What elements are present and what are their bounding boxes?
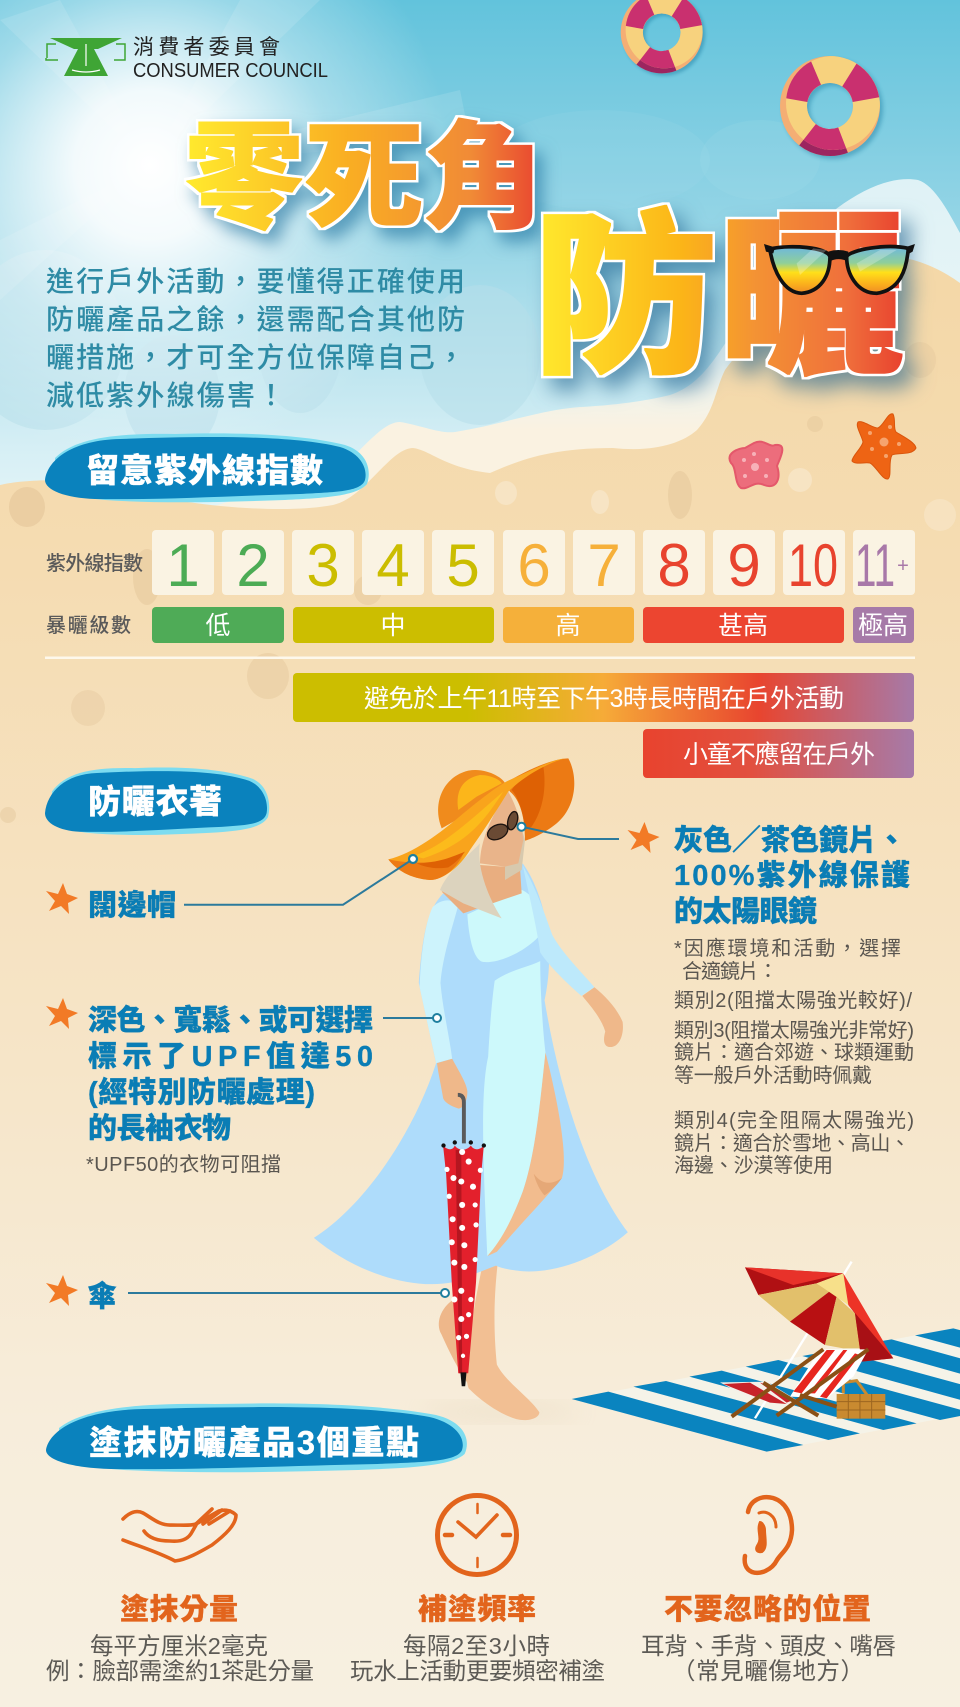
heading: 塗抹防曬產品3個重點 bbox=[46, 1403, 467, 1472]
UV number tiles: + bbox=[897, 555, 909, 577]
intro text bbox=[46, 266, 465, 411]
sunglasses notes: 類別2(阻擋太陽強光較好)/ bbox=[674, 989, 912, 1012]
dress: pale front panels bbox=[467, 890, 543, 962]
advice bar: avoid outdoors 11am-3pm bbox=[293, 673, 914, 722]
hands bbox=[437, 1059, 467, 1109]
panel: amount to apply: 例：臉部需塗約1茶匙分量 bbox=[46, 1658, 314, 1684]
exposure level bars bbox=[152, 607, 914, 643]
head: face, hair, hat and sunglasses bbox=[388, 758, 574, 918]
intro text: 防曬產品之餘，還需配合其他防 bbox=[46, 304, 465, 335]
label: 暴曬級數: 暴曬級數 bbox=[46, 614, 131, 637]
sunglasses notes: 等一般戶外活動時佩戴 bbox=[674, 1064, 872, 1087]
UV number tiles: 6 bbox=[517, 532, 551, 599]
exposure level bars: 極高 bbox=[858, 612, 908, 640]
heading: 不要忽略的位置: 不要忽略的位置 bbox=[664, 1592, 871, 1626]
background: beach foam wave bbox=[200, 179, 960, 520]
icon: hand bbox=[123, 1509, 236, 1561]
UV number tiles: 5 bbox=[446, 532, 480, 599]
callout: long-sleeved clothes: (經特別防曬處理) bbox=[88, 1075, 315, 1109]
parasol bbox=[745, 1262, 893, 1418]
callout: long-sleeved clothes bbox=[46, 998, 441, 1176]
logo text: English: CONSUMER COUNCIL bbox=[133, 60, 328, 82]
panel: reapply frequency: 玩水上活動更要頻密補塗 bbox=[350, 1658, 605, 1684]
sunglasses notes: 海邊、沙漠等使用 bbox=[674, 1154, 833, 1177]
heading: 防曬衣著: 防曬衣著 bbox=[88, 783, 222, 820]
exposure level bars: 高 bbox=[555, 612, 581, 640]
UV number tiles: 7 bbox=[587, 532, 621, 599]
starfish bullet bbox=[46, 1275, 78, 1306]
title: 零死角: 零死角 bbox=[184, 84, 544, 252]
UV number tiles: 4 bbox=[376, 532, 410, 599]
starfish bullet bbox=[628, 822, 660, 853]
basket bbox=[837, 1381, 885, 1419]
starfish bullet bbox=[46, 883, 78, 914]
panel: amount to apply bbox=[46, 1509, 314, 1684]
callout: sunglasses: 100%紫外線保護 bbox=[674, 859, 910, 892]
illustration: beach towel, parasol, deck chair and basket bbox=[572, 1262, 960, 1452]
UV number tiles: 2 bbox=[236, 532, 270, 599]
callout: sunglasses bbox=[518, 822, 914, 1177]
sunglasses notes: 鏡片：適合郊遊、球類運動 bbox=[674, 1041, 914, 1064]
deck chair bbox=[720, 1349, 868, 1417]
panel: areas not to neglect bbox=[641, 1497, 896, 1684]
illustration: woman with hat and umbrella bbox=[314, 758, 628, 1420]
text: frequency: 每隔2至3小時 bbox=[403, 1633, 550, 1659]
sunglasses notes: *因應環境和活動，選擇 bbox=[674, 936, 901, 960]
advice bar: children: 小童不應留在戶外 bbox=[683, 741, 875, 769]
icon: clock bbox=[438, 1496, 516, 1574]
callout: long-sleeved clothes: 深色、寬鬆、或可選擇 bbox=[88, 1003, 373, 1037]
sleeves bbox=[420, 900, 458, 1063]
title: 防曬: 防曬 bbox=[532, 154, 904, 409]
label: 紫外線指數: 紫外線指數 bbox=[46, 552, 143, 575]
heading: 留意紫外線指數: 留意紫外線指數 bbox=[86, 452, 323, 489]
dress: flowing cape bbox=[314, 864, 628, 1284]
background: sand pebbles bbox=[0, 342, 956, 823]
text: amount: 每平方厘米2毫克 bbox=[90, 1633, 268, 1659]
advice bar: children bbox=[643, 729, 914, 778]
callout: long-sleeved clothes: 的長袖衣物 bbox=[88, 1111, 231, 1145]
sunglasses notes: 類別4(完全阻隔太陽強光) bbox=[674, 1109, 914, 1132]
icon: pink starfish bbox=[730, 442, 782, 488]
callout: sunglasses: 灰色／茶色鏡片、 bbox=[674, 823, 906, 857]
UV number tiles: 11 bbox=[855, 532, 895, 599]
icon: orange starfish bbox=[852, 414, 916, 479]
heading: 塗抹分量: 塗抹分量 bbox=[120, 1592, 238, 1626]
callout: umbrella bbox=[46, 1275, 449, 1313]
UV number tiles: 10 bbox=[788, 532, 838, 599]
starfish bullet bbox=[46, 998, 78, 1029]
exposure level bars: 低 bbox=[205, 612, 231, 640]
UV number tiles: 8 bbox=[657, 532, 691, 599]
intro text: 進行戶外活動，要懂得正確使用 bbox=[46, 266, 465, 297]
sunglasses notes: 合適鏡片： bbox=[682, 960, 778, 983]
sunglasses notes bbox=[674, 936, 914, 1177]
callout: long-sleeved clothes: 標示了UPF值達50 bbox=[88, 1040, 373, 1073]
UV number tiles bbox=[152, 530, 915, 599]
heading: 塗抹防曬產品3個重點: 塗抹防曬產品3個重點 bbox=[89, 1424, 419, 1461]
panel: reapply frequency bbox=[350, 1496, 605, 1684]
legs bbox=[439, 1247, 539, 1420]
panel: areas not to neglect: （常見曬傷地方） bbox=[672, 1658, 864, 1684]
callout: wide-brim hat bbox=[46, 855, 417, 922]
sunglasses notes: 類別3(阻擋太陽強光非常好) bbox=[674, 1019, 914, 1042]
heading: 防曬衣著 bbox=[45, 768, 269, 835]
ground shadow bbox=[420, 1404, 580, 1420]
callout: umbrella: 傘 bbox=[88, 1279, 117, 1313]
icon: small swim ring bbox=[621, 0, 705, 76]
text: areas: 耳背、手背、頭皮、嘴唇 bbox=[641, 1633, 896, 1659]
heading: 補塗頻率: 補塗頻率 bbox=[418, 1592, 536, 1626]
footnote: UPF50: *UPF50的衣物可阻擋 bbox=[86, 1153, 281, 1176]
intro text: 減低紫外線傷害！ bbox=[46, 380, 285, 411]
umbrella bbox=[441, 1095, 486, 1386]
logo icon: scales bbox=[46, 38, 125, 76]
towel bbox=[572, 1328, 960, 1452]
UV number tiles: 1 bbox=[166, 532, 200, 599]
UV number tiles: 3 bbox=[306, 532, 340, 599]
logo: Consumer Council bbox=[46, 36, 328, 82]
callout: sunglasses: 的太陽眼鏡 bbox=[674, 894, 817, 928]
UV index scale bbox=[46, 530, 915, 643]
advice bar: avoid outdoors 11am-3pm: 避免於上午11時至下午3時長時間在戶外活動 bbox=[364, 685, 844, 713]
icon: ear bbox=[745, 1497, 792, 1573]
exposure level bars: 中 bbox=[380, 612, 406, 640]
background: sky and sea bbox=[0, 0, 960, 560]
icon: large swim ring bbox=[780, 56, 883, 159]
UV number tiles: 9 bbox=[727, 532, 761, 599]
exposure level bars: 甚高 bbox=[718, 612, 768, 640]
heading: 留意紫外線指數 bbox=[45, 433, 369, 502]
intro text: 曬措施，才可全方位保障自己， bbox=[46, 342, 465, 373]
callout: wide-brim hat: 闊邊帽 bbox=[88, 889, 176, 922]
icon: sunglasses bbox=[764, 244, 915, 293]
sunglasses notes: 鏡片：適合於雪地、高山、 bbox=[674, 1132, 910, 1155]
logo text: Chinese: 消費者委員會 bbox=[133, 36, 280, 59]
bare leg in slit bbox=[487, 1052, 564, 1256]
